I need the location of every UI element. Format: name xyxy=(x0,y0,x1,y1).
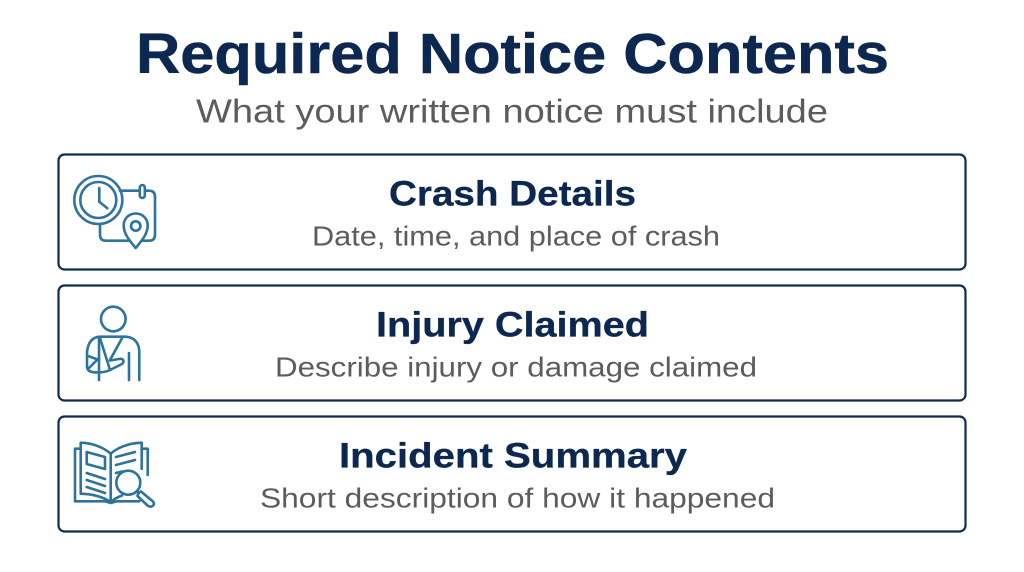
heading: crash details: Crash Details xyxy=(389,174,636,214)
text: injury claimed description: Describe injury or damage claimed xyxy=(275,352,757,382)
heading: injury claimed: Injury Claimed xyxy=(376,306,649,344)
icon: person with arm sling xyxy=(87,307,139,380)
panel: injury claimed xyxy=(58,286,966,400)
text: crash details description: Date, time, and place of crash xyxy=(312,220,720,252)
title: Required Notice Contents xyxy=(136,22,889,86)
heading: incident summary: Incident Summary xyxy=(339,436,688,476)
panel: crash details xyxy=(58,154,966,270)
icon: clock, calendar and map pin xyxy=(74,176,155,248)
icon: open book with magnifying glass xyxy=(75,443,154,507)
panel: incident summary xyxy=(58,416,966,532)
subtitle: What your written notice must include xyxy=(196,94,828,130)
text: incident summary description: Short description of how it happened xyxy=(260,482,775,514)
